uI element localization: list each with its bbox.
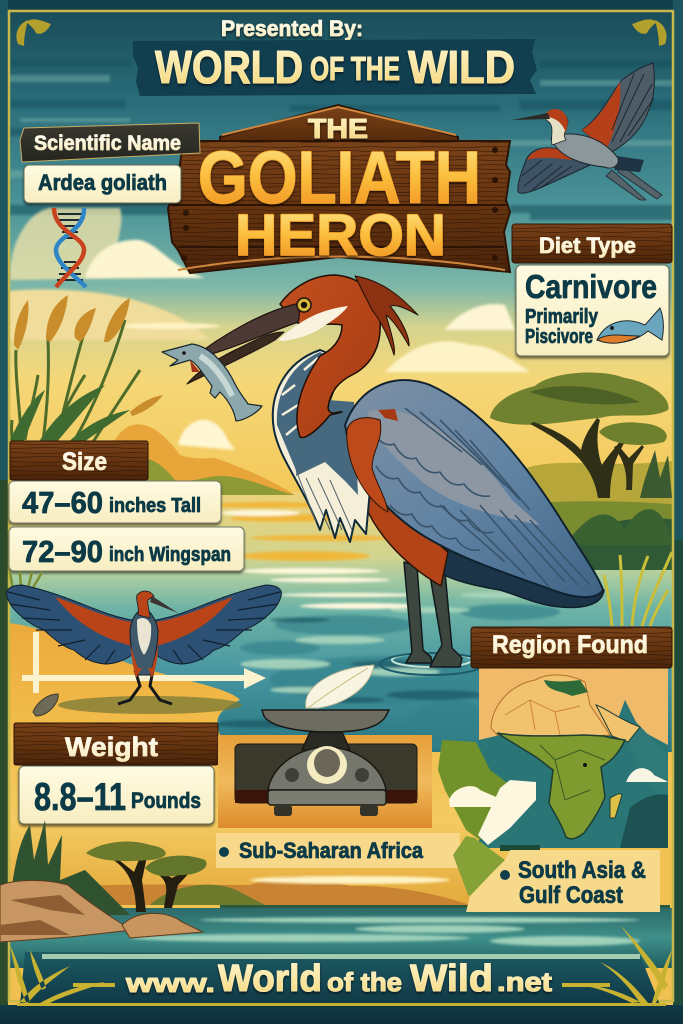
white cheek: [278, 306, 348, 341]
label wood: [471, 627, 672, 668]
body: [130, 606, 158, 675]
legs: [118, 670, 172, 704]
website url: www.: [125, 968, 215, 998]
presented by: Presented By:: [221, 16, 363, 41]
label: sub-saharan africa: [216, 833, 460, 868]
panel: size: inch Wingspan: [109, 544, 231, 566]
neck and head: [546, 111, 568, 145]
bill: [190, 304, 299, 360]
panel: size: Size: [62, 448, 107, 476]
value card: [516, 265, 669, 356]
panel: diet type: [512, 224, 672, 356]
website url: World: [218, 958, 322, 1000]
africa north: [491, 675, 610, 738]
pan: [262, 710, 389, 750]
grass corners: [10, 925, 672, 1006]
tail and dark primaries: [420, 535, 604, 607]
far hills: [0, 877, 470, 905]
dial: [307, 746, 347, 784]
label wood: [10, 441, 148, 480]
mid water: [0, 492, 683, 752]
corner ornament: left: [16, 19, 51, 46]
sign title text: GOLIATH: [198, 136, 481, 219]
icon: fish: [597, 308, 663, 343]
body: [551, 134, 618, 168]
lower water: [0, 908, 683, 968]
label wood: [512, 224, 672, 263]
sign title text: [198, 113, 481, 268]
belly: [360, 480, 448, 586]
title banner: World of the Wild: WORLD: [155, 41, 303, 93]
corner ornament: right: [632, 19, 667, 46]
panel: diet type: Piscivore: [525, 326, 593, 348]
base: [268, 790, 386, 805]
panel: size: 72–90: [22, 534, 103, 569]
far wing: [582, 63, 654, 153]
website url: .net: [497, 967, 552, 997]
website url: Wild: [410, 958, 493, 1000]
left wing: [7, 585, 132, 664]
footer band: [0, 925, 683, 1024]
label plate: [20, 123, 200, 162]
value card: [19, 766, 214, 824]
right far savanna: [480, 460, 683, 560]
panel: weight: Pounds: [131, 788, 201, 813]
scale backing: [235, 744, 417, 803]
sign title text: THE: [308, 113, 368, 144]
title banner: World of the Wild: WILD: [408, 41, 515, 93]
legs: [404, 562, 462, 667]
sign roof: [220, 105, 458, 150]
main illustration: goliath heron: [162, 275, 604, 675]
wingspan card: [9, 527, 244, 571]
crest plumes: [355, 276, 418, 355]
label: south asia and gulf coast: [466, 850, 660, 912]
clouds: [0, 208, 530, 450]
panel: scientific name: [20, 123, 200, 203]
panel: region found: Region Found: [492, 631, 648, 659]
reeds left: [10, 295, 163, 520]
acacia tree right: [490, 372, 672, 545]
icon: small stone: [33, 694, 58, 716]
label wood: [14, 723, 218, 765]
tail: [606, 163, 662, 200]
chest plumes: [273, 350, 370, 542]
title banner: World of the Wild: [133, 39, 537, 96]
flying heron illustration: [512, 63, 662, 200]
dome body: [268, 747, 386, 790]
title banner: World of the Wild: OF THE: [310, 50, 400, 87]
panel: size: inches Tall: [109, 495, 201, 517]
wing: [345, 380, 603, 597]
sign title text: HERON: [235, 203, 446, 268]
right reeds: [604, 552, 672, 626]
neck and head: [137, 591, 154, 618]
africa south: [497, 733, 625, 839]
sign planks: [168, 141, 510, 273]
panel: scientific name: Scientific Name: [34, 132, 181, 155]
label: sub-saharan africa: Sub-Saharan Africa: [239, 838, 424, 863]
right wing: [156, 585, 281, 664]
label: south asia and gulf coast: South Asia &: [518, 857, 646, 884]
value card: [24, 165, 181, 203]
asia map fragments: [438, 740, 540, 898]
panel: scientific name: Ardea goliath: [38, 170, 167, 195]
eye: [297, 298, 311, 312]
wood panel: [218, 735, 432, 828]
foreground trees and rocks: [0, 820, 207, 942]
scale illustration: [218, 665, 432, 828]
panel: diet type: Diet Type: [539, 233, 636, 258]
label: south asia and gulf coast: Gulf Coast: [519, 882, 623, 909]
panel: weight: [14, 723, 218, 824]
left hills: [115, 424, 295, 495]
upper wing coverts: [368, 410, 540, 525]
wingspan heron illustration: [7, 585, 281, 704]
left edge grass: [10, 572, 42, 605]
arabia: [596, 705, 640, 742]
panel: size: [9, 441, 244, 571]
caught fish: [162, 344, 262, 421]
head and neck: [280, 275, 380, 438]
panel: weight: Weight: [65, 732, 158, 762]
panel: diet type: Primarily: [525, 306, 599, 328]
height card: [9, 481, 221, 523]
wooden title sign: [168, 105, 510, 273]
website url: [125, 958, 552, 1000]
panel: diet type: Carnivore: [525, 268, 657, 305]
ripples: [380, 653, 484, 675]
icon: dna helix: [54, 208, 86, 287]
panel: weight: 8.8–11: [34, 776, 126, 819]
red shoulder patch: [347, 418, 388, 512]
lower left yellow bank: [0, 622, 480, 905]
size arrows: [22, 632, 266, 693]
near wing: [518, 148, 590, 193]
map: [479, 668, 668, 848]
panel: size: 47–60: [22, 485, 103, 520]
website url: of the: [327, 967, 402, 997]
feather: [306, 665, 374, 708]
panel: region found: [471, 627, 672, 848]
